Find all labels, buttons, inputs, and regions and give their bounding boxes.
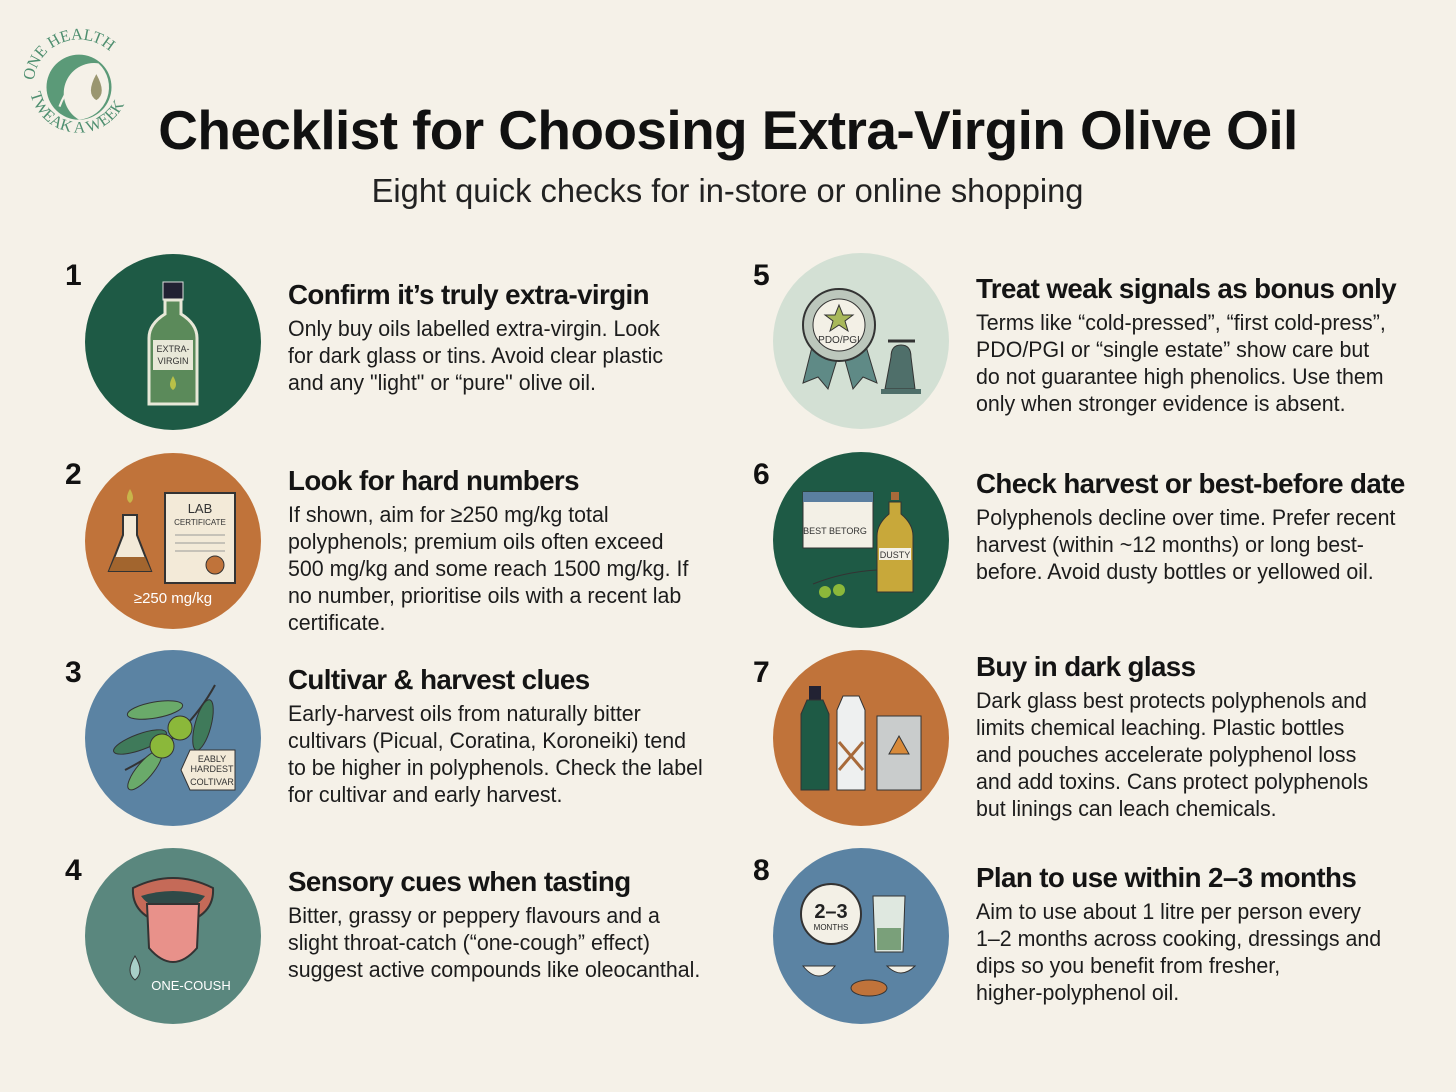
item 5: 5 xyxy=(753,259,770,292)
subtitle: Eight quick checks for in-store or online shopping xyxy=(372,172,1084,209)
item 6: 6 xyxy=(753,458,770,491)
item 2 xyxy=(65,453,261,629)
title: Checklist for Choosing Extra-Virgin Olive Oil xyxy=(158,99,1298,161)
icon: calendar and bottle: DUSTY xyxy=(880,550,910,560)
text: Confirm it’s truly extra-virgin xyxy=(288,279,649,310)
item 4: 4 xyxy=(65,854,82,887)
item 1: 1 xyxy=(65,259,82,292)
icon: bottle xyxy=(85,254,261,430)
text: harvest (within ~12 months) or long best- xyxy=(976,532,1364,557)
icon: lab certificate: CERTIFICATE xyxy=(174,518,226,527)
logo: TWEAK A WEEK xyxy=(30,90,124,132)
item 7 xyxy=(753,650,949,826)
text: do not guarantee high phenolics. Use them xyxy=(976,364,1384,389)
text: Look for hard numbers xyxy=(288,465,579,496)
icon: tongue xyxy=(85,848,261,1024)
text: polyphenols; premium oils often exceed xyxy=(288,529,663,554)
text: Check harvest or best-before date xyxy=(976,468,1405,499)
icon: lab certificate: ≥250 mg/kg xyxy=(134,590,212,607)
text: Early-harvest oils from naturally bitter xyxy=(288,701,641,726)
icon: calendar and bottle xyxy=(773,452,949,628)
text: slight throat-catch (“one-cough” effect) xyxy=(288,930,650,955)
icon: clock and kitchen: 2–3 xyxy=(814,901,848,923)
text: Cultivar & harvest clues xyxy=(288,664,590,695)
icon: olive branch: COLTIVAR xyxy=(190,777,234,787)
text: PDO/PGI or “single estate” show care but xyxy=(976,337,1369,362)
text: and pouches accelerate polyphenol loss xyxy=(976,742,1356,767)
text: suggest active compounds like oleocanthal. xyxy=(288,957,700,982)
text: limits chemical leaching. Plastic bottles xyxy=(976,715,1344,740)
icon: olive branch: HARDEST xyxy=(190,764,234,774)
item 1 xyxy=(65,254,261,430)
item 7: 7 xyxy=(753,656,770,689)
icon: lab certificate xyxy=(85,453,261,629)
text: but linings can leach chemicals. xyxy=(976,796,1277,821)
icon: calendar and bottle: BEST BETORG xyxy=(803,526,867,536)
icon: bottle: EXTRA- xyxy=(156,344,190,354)
item 2: 2 xyxy=(65,458,82,491)
text: 500 mg/kg and some reach 1500 mg/kg. If xyxy=(288,556,688,581)
item 3 xyxy=(65,650,261,826)
text: Dark glass best protects polyphenols and xyxy=(976,688,1367,713)
text: and any "light" or “pure" olive oil. xyxy=(288,370,596,395)
item 3: 3 xyxy=(65,656,82,689)
text: and add toxins. Cans protect polyphenols xyxy=(976,769,1368,794)
icon: olive branch xyxy=(85,650,261,826)
text: If shown, aim for ≥250 mg/kg total xyxy=(288,502,609,527)
text: certificate. xyxy=(288,610,385,635)
text: Buy in dark glass xyxy=(976,651,1195,682)
text: before. Avoid dusty bottles or yellowed oil. xyxy=(976,559,1374,584)
icon: clock and kitchen: MONTHS xyxy=(814,923,848,932)
icon: bottle: VIRGIN xyxy=(157,356,189,366)
icon: PDO badge: PDO/PGI xyxy=(818,335,860,346)
text: Only buy oils labelled extra-virgin. Look xyxy=(288,316,660,341)
text: dips so you benefit from fresher, xyxy=(976,953,1280,978)
text: no number, prioritise oils with a recent lab xyxy=(288,583,681,608)
item 8 xyxy=(753,848,949,1024)
text: Sensory cues when tasting xyxy=(288,866,631,897)
icon: olive branch: EABLY xyxy=(198,754,226,764)
icon: tongue: ONE-COUSH xyxy=(151,978,231,993)
item 5 xyxy=(753,253,949,429)
icon: lab certificate: LAB xyxy=(188,501,212,516)
text: higher-polyphenol oil. xyxy=(976,980,1179,1005)
item 6 xyxy=(753,452,949,628)
text: only when stronger evidence is absent. xyxy=(976,391,1346,416)
text: Treat weak signals as bonus only xyxy=(976,273,1396,304)
logo: ONE HEALTH xyxy=(24,28,116,79)
text: Aim to use about 1 litre per person every xyxy=(976,899,1361,924)
text: for cultivar and early harvest. xyxy=(288,782,562,807)
text: for dark glass or tins. Avoid clear plastic xyxy=(288,343,663,368)
text: Polyphenols decline over time. Prefer recent xyxy=(976,505,1395,530)
logo xyxy=(24,28,124,132)
icon: clock and kitchen xyxy=(773,848,949,1024)
icon: PDO badge xyxy=(773,253,949,429)
text: Bitter, grassy or peppery flavours and a xyxy=(288,903,660,928)
icon: containers xyxy=(773,650,949,826)
text: Terms like “cold-pressed”, “first cold-press”, xyxy=(976,310,1386,335)
text: cultivars (Picual, Coratina, Koroneiki) tend xyxy=(288,728,686,753)
text: 1–2 months across cooking, dressings and xyxy=(976,926,1381,951)
item 4 xyxy=(65,848,261,1024)
text: to be higher in polyphenols. Check the label xyxy=(288,755,703,780)
item 8: 8 xyxy=(753,854,770,887)
text: Plan to use within 2–3 months xyxy=(976,862,1356,893)
